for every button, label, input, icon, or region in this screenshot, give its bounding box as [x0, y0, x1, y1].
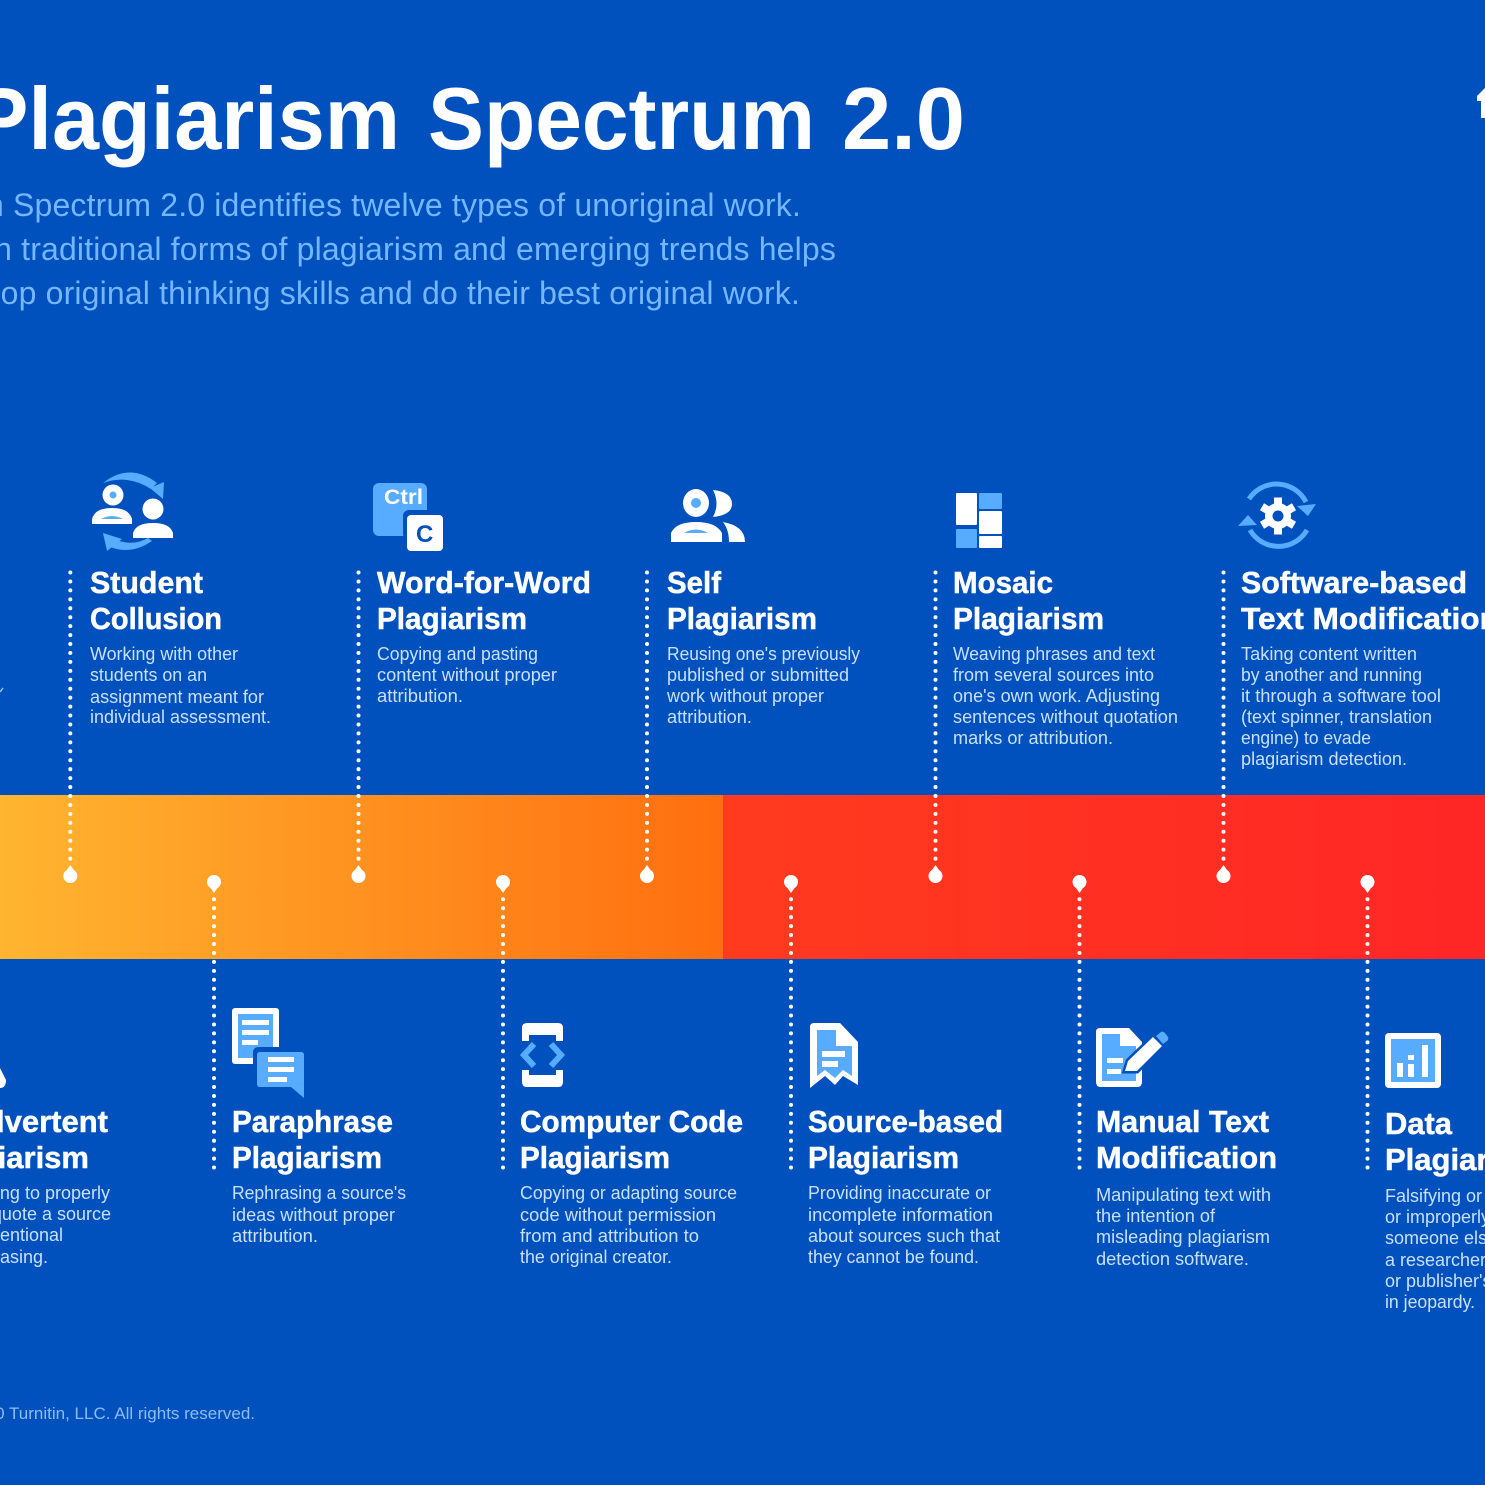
- description: the original creator.: [520, 1247, 672, 1267]
- description: attribution.: [232, 1226, 318, 1246]
- icon: ctrl c keys: [373, 483, 443, 551]
- icon: mosaic tiles: [956, 493, 1002, 548]
- description: engine) to evade: [1241, 728, 1371, 748]
- heading: Manual Text: [1096, 1104, 1269, 1139]
- dotted connector: [501, 899, 505, 1170]
- heading: Data: [1385, 1106, 1453, 1141]
- card: paraphrase plagiarism: [207, 875, 406, 1246]
- description: [90, 644, 271, 727]
- card: self plagiarism: [640, 489, 860, 883]
- icon fragment: top left card: [0, 688, 3, 692]
- heading: [232, 1104, 393, 1175]
- connector dot: [640, 865, 654, 883]
- heading: [0, 1104, 108, 1175]
- card: word-for-word plagiarism: [352, 483, 591, 883]
- connector dot: [928, 865, 943, 883]
- heading: Word-for-Word: [377, 565, 591, 600]
- heading: Plagiarism: [377, 601, 527, 636]
- dotted connector: [1366, 899, 1370, 1170]
- card: manual text modification: [1072, 875, 1277, 1269]
- icon: ctrl c keys: C: [416, 521, 433, 548]
- description: marks or attribution.: [953, 728, 1113, 748]
- description: about sources such that: [808, 1226, 1000, 1246]
- card: mosaic plagiarism: [928, 493, 1178, 883]
- subtitle: [0, 187, 836, 311]
- icon: document and pencil: [1096, 1028, 1168, 1087]
- connector dot: [63, 865, 77, 883]
- description: Copying and pasting: [377, 644, 538, 664]
- description: [1241, 644, 1441, 769]
- description: [520, 1183, 737, 1267]
- heading: Modification: [1096, 1140, 1277, 1175]
- icon: phone with code brackets: [522, 1023, 563, 1087]
- description: [377, 644, 557, 706]
- heading: [808, 1104, 1003, 1175]
- dotted connector: [645, 572, 649, 860]
- card: inadvertent plagiarism: [0, 1068, 111, 1267]
- icon fragment: inadvertent: [0, 1068, 6, 1088]
- heading: Plagiarism: [953, 601, 1104, 636]
- icon: gear with rotating arrows: [1238, 484, 1316, 546]
- icon: person with shadow: [671, 489, 745, 542]
- spectrum bar: [0, 795, 1485, 959]
- description: detection software.: [1096, 1249, 1249, 1269]
- heading: Plagiarism: [232, 1140, 382, 1175]
- heading: Software-based: [1241, 565, 1467, 600]
- description: assignment meant for: [90, 687, 264, 707]
- description: individual assessment.: [90, 707, 271, 727]
- connector dot: [1072, 875, 1087, 893]
- heading: Source-based: [808, 1104, 1003, 1139]
- connector dot: [784, 875, 798, 893]
- heading: [90, 565, 222, 636]
- heading: Paraphrase: [232, 1104, 393, 1139]
- description: [232, 1183, 406, 1246]
- description: work without proper: [666, 686, 824, 706]
- description: it through a software tool: [1241, 686, 1441, 706]
- logo fragment: [1477, 88, 1485, 118]
- description: Rephrasing a source's: [232, 1183, 406, 1203]
- description: misleading plagiarism: [1096, 1227, 1270, 1247]
- description: [808, 1183, 1000, 1267]
- card: software-based text modification: [1216, 484, 1485, 883]
- description: incomplete information: [808, 1205, 993, 1225]
- dotted connector: [212, 899, 216, 1170]
- connector dot: [207, 875, 221, 893]
- heading: Plagiarism: [808, 1140, 959, 1175]
- description: [666, 644, 860, 727]
- description: the intention of: [1096, 1206, 1216, 1226]
- heading: [1385, 1106, 1485, 1177]
- title: 2.0: [842, 69, 965, 168]
- dotted connector: [1078, 899, 1082, 1170]
- title: Spectrum: [428, 69, 815, 168]
- heading: Self: [667, 565, 722, 600]
- title: [0, 69, 965, 168]
- icon: document and speech bubble: [232, 1008, 308, 1098]
- description: Manipulating text with: [1096, 1185, 1271, 1205]
- icon: torn document: [810, 1023, 858, 1088]
- description: Working with other: [90, 644, 238, 664]
- description: attribution.: [377, 686, 463, 706]
- description: Taking content written: [1241, 644, 1417, 664]
- heading: Computer Code: [520, 1104, 743, 1139]
- heading: [953, 565, 1104, 636]
- card: computer code plagiarism: [496, 875, 743, 1267]
- description: [953, 644, 1178, 748]
- description: [1385, 1186, 1485, 1312]
- description: from and attribution to: [520, 1226, 699, 1246]
- description: sentences without quotation: [953, 707, 1178, 727]
- dotted connector: [1222, 572, 1226, 860]
- connector dot: [352, 865, 366, 883]
- description: (text spinner, translation: [1241, 707, 1432, 727]
- description: Providing inaccurate or: [808, 1183, 991, 1203]
- description: code without permission: [520, 1205, 716, 1225]
- heading: [1096, 1104, 1277, 1175]
- description: from several sources into: [953, 665, 1154, 685]
- description: ideas without proper: [232, 1205, 395, 1225]
- description: they cannot be found.: [808, 1247, 979, 1267]
- heading: Plagiarism: [520, 1140, 670, 1175]
- card: source-based plagiarism: [784, 875, 1003, 1267]
- description: in jeopardy.: [1385, 1292, 1475, 1312]
- heading: Plagiarism: [667, 601, 817, 636]
- heading: [667, 565, 817, 636]
- description: one's own work. Adjusting: [953, 686, 1160, 706]
- heading: [377, 565, 591, 636]
- dotted connector: [68, 572, 72, 860]
- icon: ctrl c keys: Ctrl: [384, 486, 423, 509]
- description: Reusing one's previously: [667, 644, 860, 664]
- description: [1096, 1185, 1271, 1269]
- description: Weaving phrases and text: [953, 644, 1155, 664]
- dotted connector: [934, 572, 938, 860]
- dotted connector: [789, 899, 793, 1170]
- heading: [520, 1104, 743, 1175]
- connector dot: [496, 875, 510, 893]
- connector dot: [1216, 865, 1230, 883]
- description: plagiarism detection.: [1241, 749, 1407, 769]
- heading: [1241, 565, 1485, 636]
- connector dot: [1360, 875, 1375, 893]
- card: student collusion: [63, 472, 271, 883]
- icon: bar chart document: [1385, 1033, 1441, 1088]
- description: [0, 1183, 111, 1267]
- description: students on an: [90, 665, 207, 685]
- card: data plagiarism: [1360, 875, 1485, 1312]
- dotted connector: [356, 572, 360, 860]
- heading: Student: [90, 565, 203, 600]
- description: published or submitted: [667, 665, 849, 685]
- icon: two students with arrows: [92, 472, 173, 551]
- description: by another and running: [1241, 665, 1422, 685]
- description: Copying or adapting source: [520, 1183, 737, 1203]
- heading: Mosaic: [953, 565, 1053, 600]
- description: attribution.: [667, 707, 752, 727]
- description: content without proper: [377, 665, 557, 685]
- heading: Collusion: [90, 601, 222, 636]
